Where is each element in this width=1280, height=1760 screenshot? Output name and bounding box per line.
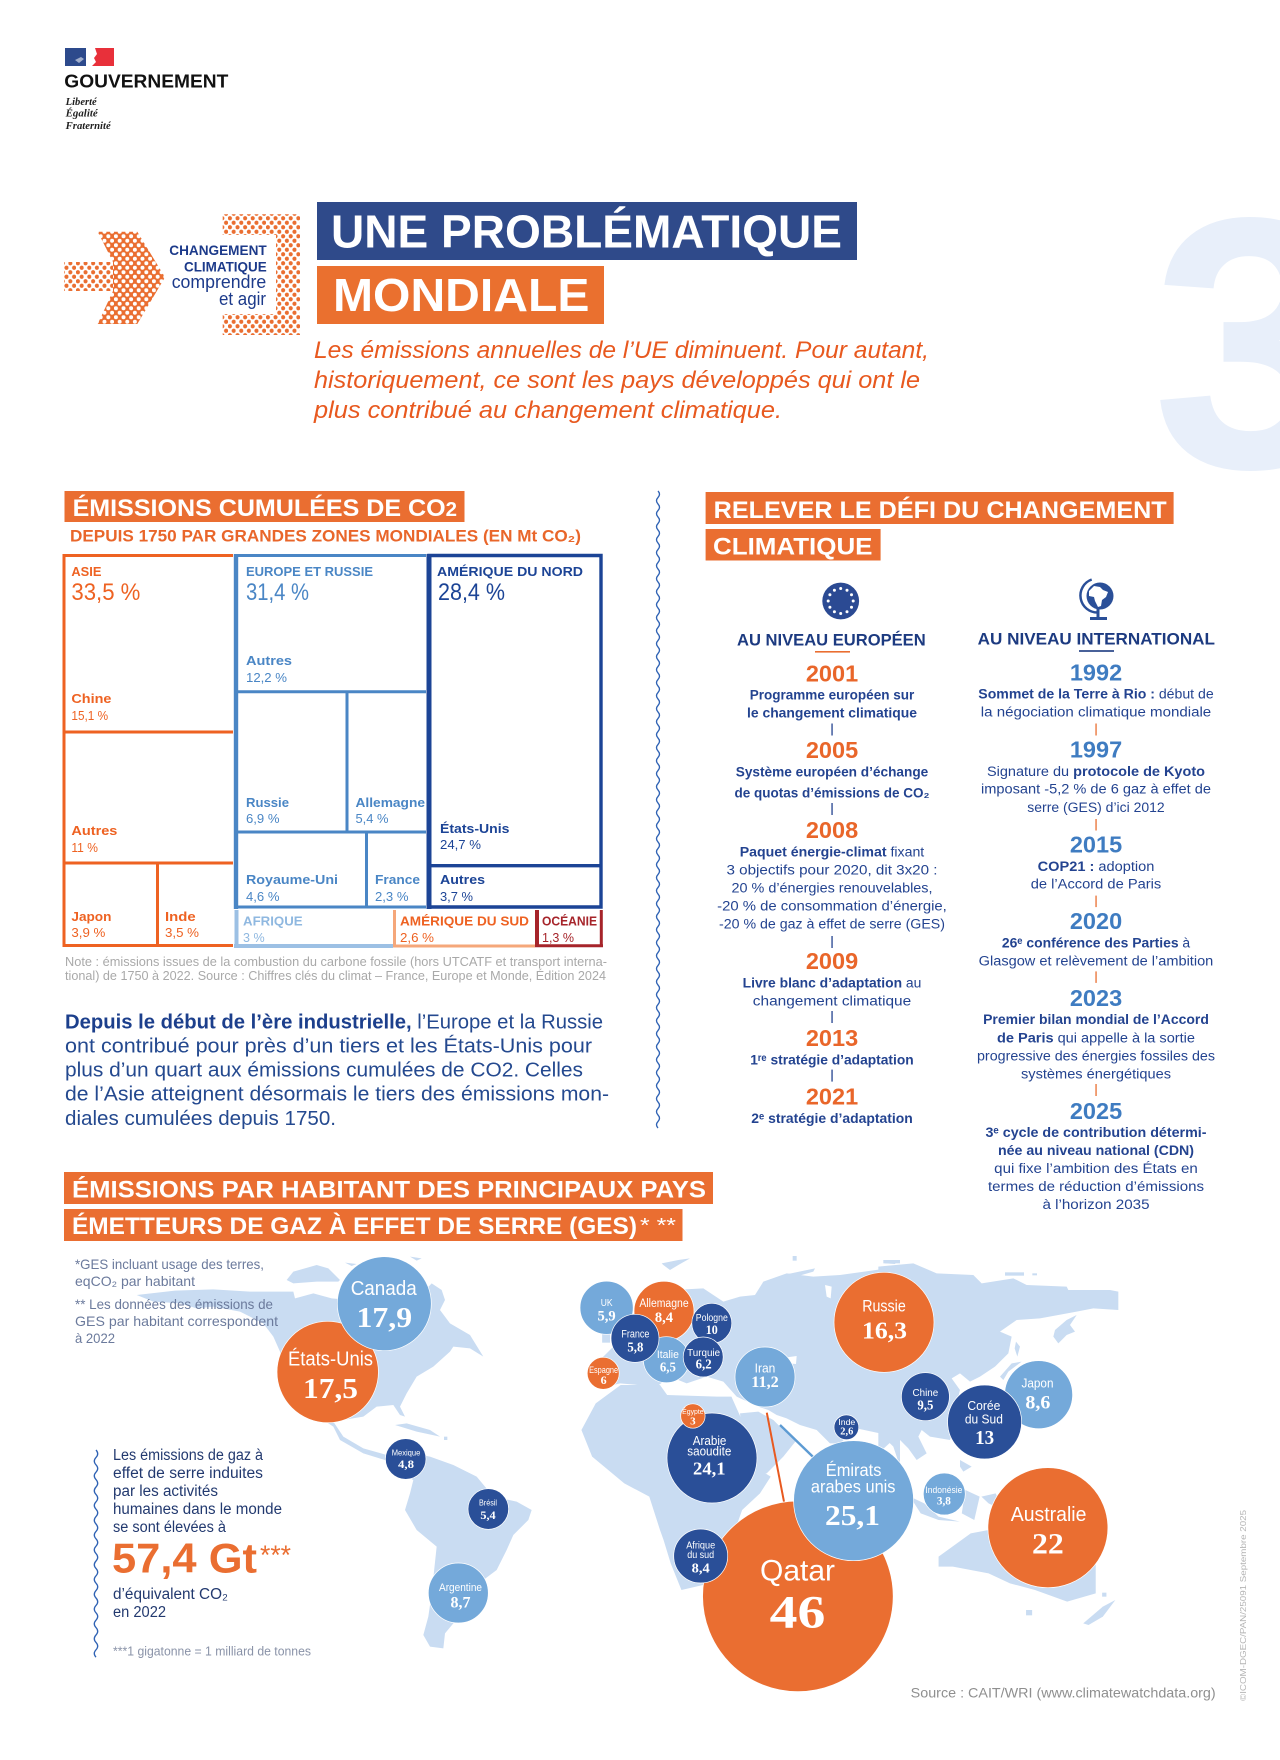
bubble: France <box>611 1314 659 1362</box>
2025: à l’horizon 2035 <box>1042 1197 1150 1213</box>
treemap: North America: 24,7 % <box>440 837 481 852</box>
2023: systèmes énergétiques <box>1021 1066 1171 1082</box>
bubble: Iran <box>735 1347 795 1407</box>
treemap: North America: AMÉRIQUE DU NORD <box>437 564 583 579</box>
heading: RELEVER LE DÉFI DU CHANGEMENT <box>714 496 1167 524</box>
bubble: Egypt: Égypte <box>682 1407 704 1416</box>
bubble: Australia: 22 <box>1032 1527 1064 1560</box>
treemap <box>64 554 603 947</box>
bubble: United Arab Emirates: 25,1 <box>825 1501 880 1532</box>
column heading: AU NIVEAU EUROPÉEN <box>737 630 926 649</box>
bubble: Brazil <box>468 1489 509 1529</box>
panel: rising to the challenge <box>706 492 1215 1213</box>
bubble: Italy: 6,5 <box>660 1361 676 1376</box>
logo text <box>169 242 267 309</box>
bubble: Italy: Italie <box>657 1349 679 1361</box>
bubble: Mexico: Mexique <box>392 1449 421 1458</box>
treemap: Europe and Russia: 6,9 % <box>246 811 280 826</box>
treemap: Asia: 3,5 % <box>165 925 199 940</box>
treemap note: tional) de 1750 à 2022. Source : Chiffres clés du climat – France, Europe et Monde, Édition 2024 <box>65 968 606 983</box>
heading <box>706 492 1174 560</box>
bubble: Iran: 11,2 <box>751 1374 779 1391</box>
bubble: Spain: Espagne <box>589 1365 618 1375</box>
2023: progressive des énergies fossiles des <box>977 1048 1215 1064</box>
panel: cumulative emissions <box>64 491 609 1130</box>
bubble: United States <box>277 1321 378 1423</box>
body paragraph: diales cumulées depuis 1750. <box>65 1108 336 1130</box>
bubble: Japan <box>1005 1361 1073 1429</box>
treemap: Europe and Russia: France <box>375 872 420 887</box>
bubble: Brazil: 5,4 <box>480 1508 496 1522</box>
bubble: South Korea: du Sud <box>965 1411 1003 1426</box>
2005: 2005 <box>806 737 858 763</box>
bubble: United States: 17,5 <box>303 1373 358 1405</box>
map: Eurasia west and Middle East <box>593 1256 900 1473</box>
footnotes: GES par habitant correspondent <box>75 1313 278 1329</box>
treemap: Asia: 33,5 % <box>71 579 140 606</box>
bubble: Brazil: Brésil <box>479 1499 497 1508</box>
panel: emissions per capita <box>64 1172 1216 1701</box>
bubble: Russia: 16,3 <box>862 1318 907 1344</box>
1997: Signature du protocole de Kyoto <box>987 764 1205 780</box>
2009: Livre blanc d’adaptation au <box>743 975 921 991</box>
treemap: Asia: 11 % <box>71 840 98 855</box>
heading: ÉMISSIONS CUMULÉES DE CO 2 <box>73 494 457 522</box>
bubble: United Arab Emirates <box>794 1441 914 1561</box>
bubble: Argentina: Argentine <box>439 1582 482 1594</box>
2015 <box>1031 832 1161 893</box>
bubble: South Korea <box>948 1385 1022 1459</box>
bubble: Argentina: 8,7 <box>450 1595 471 1612</box>
treemap: South America: 2,6 % <box>400 930 434 945</box>
bubble: Turkey: Turquie <box>687 1348 721 1359</box>
logo text: CHANGEMENT <box>169 242 267 258</box>
bubble: Mexico: 4,8 <box>398 1457 414 1471</box>
2025: qui fixe l’ambition des États en <box>994 1160 1198 1177</box>
bubble: Spain: 6 <box>601 1373 607 1387</box>
bubble: India: 2,6 <box>840 1426 853 1438</box>
treemap: Africa: 3 % <box>243 930 265 945</box>
bubble: Canada: Canada <box>351 1278 418 1300</box>
bubble: Argentina <box>428 1563 488 1623</box>
2021: 2021 <box>806 1084 858 1110</box>
2013: 2013 <box>806 1025 858 1051</box>
heading <box>64 1172 713 1241</box>
bubble: Saudi Arabia <box>667 1413 757 1503</box>
2008: 2008 <box>806 817 858 843</box>
connector: Emirates <box>780 1425 813 1457</box>
treemap: Oceania: 1,3 % <box>542 930 574 945</box>
bubble: Germany: Allemagne <box>639 1298 689 1310</box>
2025: née au niveau national (CDN) <box>998 1143 1194 1159</box>
callout: global emissions <box>94 1447 311 1659</box>
treemap: Europe and Russia: 31,4 % <box>246 579 309 606</box>
treemap: Asia <box>64 556 233 946</box>
bubble: UK: 5,9 <box>598 1309 616 1325</box>
heading: ÉMETTEURS DE GAZ À EFFET DE SERRE (GES) <box>72 1212 637 1240</box>
bubble: South Korea: Corée <box>967 1398 1000 1413</box>
2009 <box>743 948 921 1009</box>
treemap: Europe and Russia: Royaume-Uni <box>246 872 338 887</box>
map: East Asia <box>878 1260 1118 1472</box>
treemap: Europe and Russia: Allemagne <box>356 795 425 810</box>
bubble: United States: États-Unis <box>288 1348 373 1371</box>
bubble: Japan: Japon <box>1022 1376 1054 1391</box>
treemap: Europe and Russia <box>236 554 426 909</box>
treemap: Europe and Russia: 12,2 % <box>246 670 287 685</box>
bubble: France: 5,8 <box>627 1340 643 1355</box>
footnotes: eqCO₂ par habitant <box>75 1273 195 1289</box>
connector: Qatar <box>767 1413 784 1502</box>
treemap: Africa: AFRIQUE <box>243 914 303 929</box>
bubble: South Africa: 8,4 <box>692 1562 710 1577</box>
bubble: Saudi Arabia: Arabie <box>693 1434 726 1448</box>
2005: de quotas d’émissions de CO₂ <box>734 785 930 801</box>
intro text: historiquement, ce sont les pays développés qui ont le <box>314 367 920 394</box>
2023 <box>977 985 1215 1082</box>
heading: CLIMATIQUE <box>713 534 872 560</box>
bubble: Egypt: 3 <box>690 1415 696 1427</box>
map: North America <box>137 1257 483 1460</box>
footnotes: *GES incluant usage des terres, <box>75 1256 264 1272</box>
timeline <box>717 661 947 1127</box>
bubble: Germany: 8,4 <box>655 1310 674 1326</box>
bubble: Turkey: 6,2 <box>696 1358 712 1373</box>
treemap: Europe and Russia: 4,6 % <box>246 889 280 904</box>
treemap: Asia: Chine <box>71 691 111 706</box>
bubble: Poland: Pologne <box>696 1313 728 1324</box>
column heading: AU NIVEAU INTERNATIONAL <box>978 630 1215 648</box>
2001 <box>747 661 917 722</box>
map: South America <box>393 1453 532 1648</box>
callout footnote: ***1 gigatonne = 1 milliard de tonnes <box>113 1645 311 1659</box>
bubble: Iran: Iran <box>755 1361 775 1376</box>
column: international level <box>977 580 1215 1213</box>
treemap: Oceania <box>535 910 603 947</box>
heading: ÉMISSIONS PAR HABITANT DES PRINCIPAUX PAYS <box>72 1176 706 1204</box>
treemap: Asia: 15,1 % <box>71 708 108 723</box>
bubble: South Africa: du sud <box>687 1550 714 1561</box>
bubble: Qatar <box>703 1501 893 1692</box>
column: European level <box>717 583 947 1127</box>
2005: Système européen d’échange <box>736 765 928 781</box>
2008: -20 % de gaz à effet de serre (GES) <box>719 917 945 933</box>
callout text: par les activités <box>113 1483 218 1500</box>
bubble: Saudi Arabia: 24,1 <box>693 1458 726 1478</box>
treemap: Europe and Russia: 2,3 % <box>375 889 409 904</box>
treemap: Oceania: OCÉANIE <box>542 914 597 929</box>
2023: de Paris qui appelle à la sortie <box>997 1030 1195 1046</box>
source: Source : CAIT/WRI (www.climatewatchdata.org) <box>911 1685 1216 1701</box>
bubble: Poland: 10 <box>706 1322 718 1337</box>
bubble: Germany <box>634 1281 694 1341</box>
2008: 3 objectifs pour 2020, dit 3x20 : <box>726 862 938 878</box>
callout figure: *** <box>260 1540 291 1570</box>
bubble: Japan: 8,6 <box>1025 1392 1050 1413</box>
bubble: Canada: 17,9 <box>356 1302 412 1334</box>
2021: 2ᵉ stratégie d’adaptation <box>751 1111 913 1127</box>
2025: 3ᵉ cycle de contribution détermi- <box>986 1125 1207 1141</box>
treemap note <box>65 955 607 983</box>
treemap: Asia: Japon <box>71 909 111 924</box>
logo: Gouvernement <box>64 48 229 132</box>
2015: de l’Accord de Paris <box>1031 877 1161 893</box>
body paragraph: ont contribué pour près d’un tiers et les États-Unis pour <box>65 1034 592 1057</box>
footnotes <box>75 1256 278 1346</box>
treemap: Asia: Autres <box>71 823 117 838</box>
callout text: Les émissions de gaz à <box>113 1447 263 1464</box>
icon: EU flag <box>822 583 859 619</box>
callout unit: en 2022 <box>113 1604 166 1621</box>
bubble: China: Chine <box>913 1387 938 1399</box>
subheading: DEPUIS 1750 PAR GRANDES ZONES MONDIALES (EN Mt CO₂) <box>70 527 581 546</box>
bubble: Turkey <box>683 1337 723 1377</box>
2023: 2023 <box>1070 985 1122 1011</box>
1997: serre (GES) d’ici 2012 <box>1027 800 1165 816</box>
footnotes: à 2022 <box>75 1330 115 1346</box>
flag <box>65 48 114 66</box>
callout text: se sont élevées à <box>113 1519 226 1536</box>
2008: -20 % de consommation d’énergie, <box>717 898 947 914</box>
treemap: North America: 28,4 % <box>438 579 505 606</box>
logo text: CLIMATIQUE <box>184 258 267 274</box>
treemap: Europe and Russia: Russie <box>246 795 289 810</box>
bubble: Indonesia <box>923 1473 965 1515</box>
callout text: effet de serre induites <box>113 1465 263 1482</box>
logo text: et agir <box>219 289 266 309</box>
2020: 26ᵉ conférence des Parties à <box>1002 936 1190 952</box>
2025 <box>986 1098 1207 1213</box>
bubble: Qatar: Qatar <box>760 1555 835 1588</box>
treemap: North America: États-Unis <box>440 821 509 836</box>
treemap: Asia: Inde <box>165 909 196 924</box>
2008 <box>717 817 947 933</box>
2008: Paquet énergie-climat fixant <box>740 845 924 861</box>
bubble: UK: UK <box>601 1297 612 1309</box>
bubble: Australia: Australie <box>1011 1504 1086 1526</box>
body paragraph: de l’Asie atteignent désormais le tiers des émissions mon- <box>65 1084 609 1106</box>
title <box>317 202 857 324</box>
bubble: Russia <box>834 1272 934 1372</box>
intro text <box>313 337 929 424</box>
2009: changement climatique <box>753 993 911 1009</box>
title line 2: MONDIALE <box>333 269 589 321</box>
2005 <box>734 737 930 801</box>
bracket icon <box>223 214 300 335</box>
motto: Fraternité <box>65 121 111 132</box>
bubble: Indonesia: 3,8 <box>937 1493 951 1507</box>
heading: * ** <box>640 1215 676 1237</box>
treemap: South America: AMÉRIQUE DU SUD <box>400 914 529 929</box>
2021 <box>751 1084 913 1127</box>
bubble: Italy <box>643 1337 689 1383</box>
vertical credit: ©ICOM-DGEC/PAN/25091 Septembre 2025 <box>1238 1510 1248 1701</box>
intro text: Les émissions annuelles de l’UE diminuent. Pour autant, <box>314 337 929 364</box>
1992: Sommet de la Terre à Rio : début de <box>978 687 1214 703</box>
treemap note: Note : émissions issues de la combustion du carbone fossile (hors UTCATF et transport interna- <box>65 955 607 969</box>
body paragraph <box>65 1011 609 1130</box>
treemap: South America <box>393 910 535 947</box>
bubble: United Arab Emirates: arabes unis <box>811 1476 896 1496</box>
motto: Égalité <box>65 108 98 120</box>
2008: 20 % d’énergies renouvelables, <box>732 880 932 896</box>
callout text: humaines dans le monde <box>113 1501 282 1518</box>
treemap: Africa <box>234 910 393 947</box>
treemap: Europe and Russia: EUROPE ET RUSSIE <box>246 564 373 579</box>
bubble: Mexico <box>385 1439 426 1479</box>
2009: 2009 <box>806 948 858 974</box>
1997: imposant -5,2 % de 6 gaz à effet de <box>981 782 1211 798</box>
bubble: Spain <box>587 1357 619 1389</box>
2020: Glasgow et relèvement de l’ambition <box>979 953 1213 969</box>
bubble: Poland <box>692 1303 732 1343</box>
bubble: Australia <box>988 1468 1108 1588</box>
wordmark: GOUVERNEMENT <box>64 71 229 92</box>
logo text: comprendre <box>172 272 266 292</box>
1997 <box>981 736 1211 816</box>
1992: la négociation climatique mondiale <box>981 705 1211 721</box>
2015: 2015 <box>1070 832 1122 858</box>
callout unit: d’équivalent CO₂ <box>113 1586 228 1603</box>
timeline <box>977 660 1215 1213</box>
callout figure: 57,4 Gt <box>112 1535 257 1582</box>
treemap: Europe and Russia: 5,4 % <box>356 811 389 826</box>
bubble: India: Inde <box>838 1417 856 1427</box>
bubble: India <box>834 1415 859 1440</box>
bubble: Egypt <box>681 1404 705 1428</box>
1992 <box>978 660 1214 721</box>
bubble: Russia: Russie <box>862 1297 906 1316</box>
2015: COP21 : adoption <box>1038 859 1154 875</box>
1992: 1992 <box>1070 660 1122 686</box>
2001: Programme européen sur <box>750 688 915 704</box>
callout text <box>113 1447 282 1536</box>
treemap: Asia: 3,9 % <box>71 925 106 940</box>
title line 1: UNE PROBLÉMATIQUE <box>331 205 842 257</box>
bubble: United Arab Emirates: Émirats <box>826 1460 882 1480</box>
treemap: North America: Autres <box>440 872 485 887</box>
motto: Liberté <box>65 97 97 108</box>
2020: 2020 <box>1070 908 1122 934</box>
bubble: South Africa <box>674 1529 728 1583</box>
1997: 1997 <box>1070 736 1122 762</box>
bubble: Saudi Arabia: saoudite <box>687 1444 731 1458</box>
bubble: UK <box>580 1281 633 1334</box>
bubble: Indonesia: Indonésie <box>925 1485 962 1496</box>
2020 <box>979 908 1213 969</box>
logo: changement climatique <box>64 214 300 335</box>
treemap: Europe and Russia: Autres <box>246 653 292 668</box>
bubble: Canada <box>337 1257 431 1351</box>
treemap: Asia: ASIE <box>71 564 102 579</box>
arrow icon <box>64 232 165 324</box>
bubble: China <box>901 1373 949 1421</box>
motto <box>65 97 111 132</box>
bubble: China: 9,5 <box>917 1398 933 1413</box>
2023: Premier bilan mondial de l’Accord <box>983 1012 1209 1028</box>
treemap: North America: 3,7 % <box>440 889 473 904</box>
intro text: plus contribué au changement climatique. <box>313 397 782 424</box>
bubble: South Korea: 13 <box>975 1427 994 1449</box>
footnotes: ** Les données des émissions de <box>75 1296 273 1312</box>
body paragraph: Depuis le début de l’ère industrielle, l’Europe et la Russie <box>65 1011 603 1033</box>
2013 <box>750 1025 914 1069</box>
2001: 2001 <box>806 661 858 687</box>
bubble: South Africa: Afrique <box>686 1540 716 1551</box>
bubble: France: France <box>621 1329 649 1341</box>
map: Africa, Indonesia and Oceania <box>581 1333 1115 1625</box>
body paragraph: plus d’un quart aux émissions cumulées de CO2. Celles <box>65 1060 583 1082</box>
2025: termes de réduction d’émissions <box>988 1179 1204 1195</box>
icon: globe <box>1080 580 1114 620</box>
2013: 1ʳᵉ stratégie d’adaptation <box>750 1053 914 1069</box>
2025: 2025 <box>1070 1098 1122 1124</box>
bubble: Qatar: 46 <box>770 1586 825 1638</box>
treemap: North America <box>429 554 601 909</box>
callout unit <box>113 1586 228 1621</box>
2001: le changement climatique <box>747 706 917 722</box>
